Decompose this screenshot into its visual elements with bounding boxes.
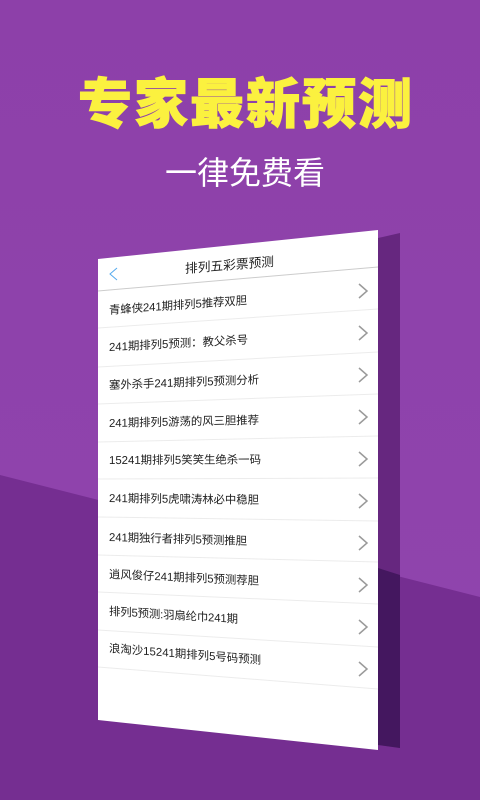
- list row 3: [98, 368, 378, 404]
- list row 2: 241期排列5预测：教父杀号: [109, 333, 248, 354]
- list row 6: [98, 491, 378, 521]
- phone side shadow: [378, 233, 400, 748]
- title: 专家最新预测: [78, 75, 412, 135]
- list row 4: 241期排列5游荡的风三胆推荐: [109, 413, 259, 430]
- list row 1: [98, 284, 378, 328]
- list row 6: 241期排列5虎啸涛林必中稳胆: [109, 491, 259, 507]
- subtitle: 一律免费看: [165, 155, 325, 191]
- list row 3: 塞外杀手241期排列5预测分析: [109, 372, 259, 392]
- back arrow icon: [110, 268, 117, 280]
- list row 7: 241期独行者排列5预测推胆: [109, 530, 247, 548]
- list row 9: [98, 604, 378, 647]
- list row 8: [98, 567, 378, 604]
- list row 5: 15241期排列5笑笑生绝杀一码: [109, 452, 261, 467]
- list row 10: [98, 641, 378, 689]
- list row 5: [98, 452, 378, 479]
- list row 1: 青蜂侠241期排列5推荐双胆: [109, 293, 247, 317]
- header title: 排列五彩票预测: [185, 254, 274, 276]
- list row 10: 浪淘沙15241期排列5号码预测: [109, 641, 261, 667]
- list row 7: [98, 530, 378, 562]
- phone screen panel: [98, 230, 378, 750]
- list row 2: [98, 326, 378, 367]
- list row 4: [98, 410, 378, 442]
- header divider: [98, 267, 378, 291]
- list row 8: 逍风俊仔241期排列5预测荐胆: [109, 567, 259, 588]
- list row 9: 排列5预测:羽扇纶巾241期: [109, 604, 238, 626]
